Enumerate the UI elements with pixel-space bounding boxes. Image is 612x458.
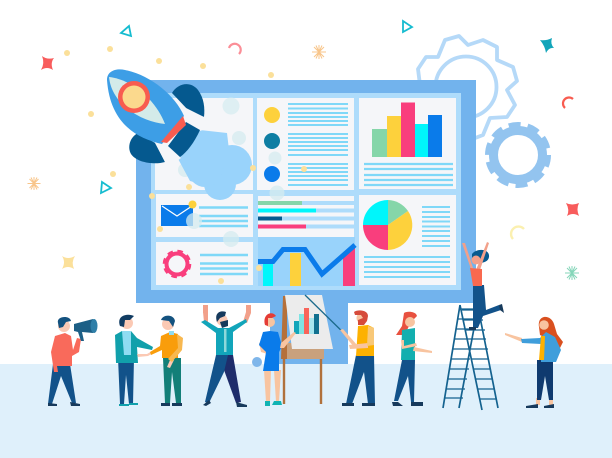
icon: triangle right	[403, 21, 412, 32]
yellow column	[290, 253, 301, 286]
icon: triangle left	[101, 182, 111, 193]
legs	[118, 358, 134, 404]
icon: large outline gear	[418, 36, 517, 140]
head	[356, 312, 368, 324]
head	[405, 317, 415, 327]
legs	[163, 358, 181, 403]
flip chart	[281, 295, 333, 404]
bars	[372, 102, 442, 157]
upper fin	[172, 84, 204, 117]
person: man in teal jacket	[115, 315, 153, 406]
white gap behind people	[348, 303, 478, 364]
icon: orange burst top	[312, 45, 326, 59]
lower arm	[349, 343, 368, 349]
rocket exhaust	[176, 130, 252, 200]
shoes	[119, 403, 138, 406]
person: woman in teal	[392, 312, 432, 406]
torso and arms	[51, 333, 81, 372]
pink bar	[258, 224, 306, 228]
cyan column	[263, 264, 273, 286]
head	[162, 318, 174, 330]
lower fin	[129, 133, 165, 163]
forearms	[203, 312, 251, 323]
icon: triangle top	[121, 26, 131, 36]
jacket	[115, 331, 153, 363]
arm	[340, 329, 357, 347]
legs	[394, 360, 415, 402]
person: woman jumping	[462, 242, 504, 330]
hair	[264, 313, 276, 326]
rocket body	[107, 69, 184, 144]
rocket band	[161, 116, 186, 143]
icon: red star right	[566, 203, 579, 216]
collar	[169, 331, 174, 335]
shoes	[48, 402, 80, 406]
panel: pie chart	[359, 195, 456, 285]
tie	[224, 329, 226, 352]
sleeve	[367, 326, 374, 346]
head	[472, 256, 480, 264]
top	[470, 268, 482, 286]
arm	[505, 333, 522, 342]
teal bullet	[264, 133, 280, 149]
shirt and sleeves	[201, 319, 247, 355]
hair	[161, 316, 175, 327]
floor	[0, 364, 612, 458]
legs	[346, 355, 375, 404]
wooden post	[281, 296, 287, 359]
head	[58, 320, 70, 332]
monitor stand	[270, 303, 348, 364]
person: megaphone man	[48, 317, 98, 406]
text lines	[364, 164, 453, 185]
hair	[58, 317, 71, 328]
icon: teal star	[540, 38, 554, 53]
shirt	[122, 331, 131, 355]
person: woman directing	[505, 317, 563, 408]
rocket window panel	[109, 77, 165, 124]
navy bar	[258, 216, 282, 220]
icon: pink gear	[164, 251, 190, 277]
yellow bullet	[264, 107, 280, 123]
shoes	[526, 404, 554, 408]
backing board	[287, 343, 324, 359]
panel: bar chart	[359, 98, 456, 189]
icon: red arc	[563, 97, 573, 108]
arm	[401, 340, 432, 353]
panel: settings	[156, 242, 253, 285]
shoes	[265, 401, 282, 406]
trend line	[258, 245, 355, 274]
person: woman presenting	[252, 313, 296, 406]
hair	[472, 250, 489, 263]
rear section	[168, 122, 200, 157]
shoes	[161, 403, 182, 406]
ankles	[536, 398, 553, 405]
hair	[539, 317, 563, 352]
shoes	[203, 400, 247, 407]
head	[121, 317, 133, 329]
handshake arms	[137, 351, 155, 357]
head	[265, 317, 275, 327]
sweater	[150, 332, 178, 358]
far arm	[259, 343, 274, 356]
ladder	[443, 305, 498, 410]
hair and beard	[354, 310, 368, 325]
far leg	[224, 355, 241, 403]
beard and hair	[216, 311, 228, 328]
background bubbles	[178, 98, 284, 247]
person: man in orange sweater	[150, 316, 183, 406]
paper	[285, 295, 333, 349]
hair	[396, 312, 417, 335]
confetti dots	[64, 46, 307, 284]
panel: line chart	[258, 237, 355, 286]
legs	[48, 364, 76, 404]
arms	[462, 242, 489, 272]
monitor frame	[136, 80, 476, 303]
shirt	[401, 328, 415, 360]
pointer stick	[305, 295, 353, 342]
shoes	[392, 402, 423, 406]
text lines	[200, 255, 248, 274]
person: man with pointer	[340, 310, 375, 406]
monitor	[136, 80, 476, 364]
chart bars	[294, 308, 319, 334]
easel legs	[284, 358, 321, 404]
panel: rocket backdrop	[155, 98, 253, 190]
lower hand	[167, 360, 174, 368]
person: man cheering	[201, 305, 251, 407]
icon: yellow arc	[511, 227, 524, 239]
icon: orange burst left	[28, 177, 40, 190]
hands	[203, 305, 251, 313]
head	[216, 314, 228, 326]
icon: envelope	[161, 205, 193, 226]
shoes	[469, 304, 504, 330]
track lines	[258, 203, 354, 226]
rails	[443, 305, 498, 410]
text lines	[288, 104, 348, 185]
porthole	[118, 81, 150, 113]
icon: green burst	[565, 266, 579, 280]
legs	[537, 360, 553, 400]
blue blob behind	[252, 357, 262, 367]
inner shirt	[539, 336, 545, 360]
icon: pink arc	[229, 44, 241, 54]
cyan bar	[258, 208, 316, 212]
near leg	[205, 355, 228, 403]
yellow accent dot on envelope	[188, 200, 196, 208]
text lines	[199, 208, 248, 226]
sleeve	[168, 334, 183, 362]
megaphone	[74, 319, 98, 341]
vest	[356, 325, 374, 356]
nozzle highlights	[155, 108, 208, 165]
icon: yellow star	[62, 256, 75, 269]
green bar	[258, 201, 302, 205]
panel: email	[156, 194, 253, 237]
jacket	[521, 332, 561, 362]
text lines	[364, 207, 450, 277]
panel: list with circles	[257, 98, 354, 190]
blue bullet	[264, 166, 280, 182]
panel: progress bars	[258, 196, 354, 237]
monitor screen	[151, 93, 461, 290]
steps	[445, 309, 496, 399]
pink column	[343, 247, 355, 286]
dress	[259, 331, 282, 371]
hair	[119, 315, 134, 327]
icon: red star left	[41, 56, 54, 70]
pie	[363, 200, 412, 250]
rocket	[107, 69, 252, 200]
legs	[473, 285, 501, 328]
arm	[280, 332, 296, 348]
icon: small filled gear	[488, 124, 548, 186]
legs	[264, 370, 281, 402]
shoes	[342, 403, 375, 406]
head	[539, 320, 549, 330]
